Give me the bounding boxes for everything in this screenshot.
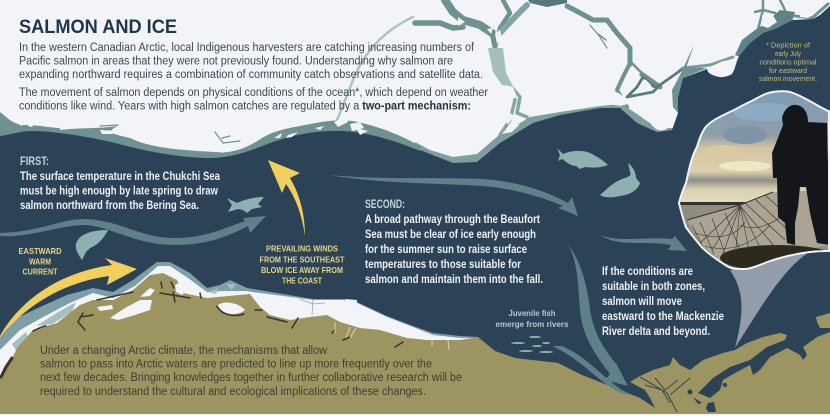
label: prevailing winds: FROM THE SOUTHEAST <box>260 254 345 264</box>
coast ice strip <box>0 266 478 385</box>
text: first <box>20 154 220 212</box>
left ice margin ribbon <box>0 112 420 158</box>
pale drips and cracks on coast <box>335 322 449 350</box>
net area <box>687 190 830 265</box>
text: both zones <box>602 264 724 338</box>
text: climate outlook: next few decades. Bringing knowledges together in further collaborative research will be <box>40 372 462 384</box>
footnote: for eastward <box>769 66 807 75</box>
text: second <box>365 197 543 286</box>
arrow: toward delta <box>568 245 628 386</box>
clouds <box>708 103 790 171</box>
text: both zones: eastward to the Mackenzie <box>602 309 724 323</box>
intro text: Pacific salmon in areas that they were not previously found. Understanding why salmon are <box>19 56 453 68</box>
callout wedge to delta <box>730 253 808 348</box>
label: prevailing winds: BLOW ICE AWAY FROM <box>261 265 343 275</box>
light ice lead <box>488 48 514 88</box>
intro text <box>19 42 488 112</box>
label: eastward warm current: CURRENT <box>22 266 58 276</box>
footnote: conditions optimal <box>760 58 817 66</box>
text: first: must be high enough by late spring to draw <box>20 184 219 198</box>
crack lines on shelf <box>300 299 325 315</box>
intro text: The movement of salmon depends on physical conditions of the ocean*, which depend on weather <box>19 87 488 99</box>
fishing net <box>687 192 795 262</box>
footnote: * Depiction of <box>766 40 811 50</box>
text: both zones: salmon will move <box>602 294 682 308</box>
salmon icons <box>76 148 640 260</box>
coast ice haze <box>0 262 478 385</box>
delta rivers <box>640 377 690 412</box>
label: prevailing winds: PREVAILING WINDS <box>266 244 338 254</box>
ice patches on land <box>97 278 245 320</box>
label: prevailing winds <box>260 244 345 286</box>
footnote: early July <box>775 49 801 58</box>
ice floes <box>14 14 812 153</box>
spike and band near right floes <box>672 45 707 113</box>
text: climate outlook: salmon to pass into Arctic waters are predicted to line up more frequently over the <box>40 358 432 370</box>
text: second: temperatures to those suitable for <box>365 257 521 271</box>
title: SALMON AND ICE <box>19 17 177 38</box>
text: both zones: River delta and beyond. <box>602 324 710 338</box>
arrow: Chukchi current <box>0 216 266 245</box>
floe offshore <box>345 299 357 305</box>
ice margin upper right <box>735 10 795 58</box>
text: first: FIRST: <box>20 154 49 168</box>
footnote <box>759 40 817 83</box>
footnote: salmon movement. <box>759 74 817 83</box>
dark ice patch top <box>528 0 567 7</box>
photo: harvester with net <box>675 90 830 275</box>
intro text: In the western Canadian Arctic, local Indigenous harvesters are catching increasing numbers of <box>19 42 475 54</box>
ground shadow <box>720 245 824 268</box>
text: second: Sea must be clear of ice early enough <box>365 227 536 241</box>
text: second: SECOND: <box>365 197 405 211</box>
coast dark shoreline marks <box>1 282 403 377</box>
intro text: conditions like wind. Years with high salmon catches are regulated by a two-part mechanism: <box>19 100 471 112</box>
text: second: A broad pathway through the Beaufort <box>365 212 540 226</box>
icon: salmon top <box>557 148 608 169</box>
label: eastward warm current: WARM <box>29 256 51 266</box>
icon: juvenile fish school <box>511 336 553 353</box>
label: prevailing winds: THE COAST <box>282 276 323 286</box>
label: juvenile fish: Juvenile fish <box>508 309 556 318</box>
bottom page margin <box>0 414 830 416</box>
arrow: juvenile fish from river <box>553 346 628 395</box>
arrow: offshore current <box>600 235 687 251</box>
land <box>0 273 830 414</box>
text: first: salmon northward from the Bering Sea. <box>20 198 199 212</box>
text: both zones: suitable in both zones, <box>602 279 705 293</box>
text: second: for the summer sun to raise surface <box>365 242 527 256</box>
label: eastward warm current: EASTWARD <box>18 246 62 256</box>
text: climate outlook <box>40 345 462 398</box>
arrow: prevailing winds <box>268 160 305 236</box>
text: climate outlook: Under a changing Arctic climate, the mechanisms that allow <box>40 345 328 357</box>
current arrows <box>0 175 687 395</box>
label: juvenile fish: emerge from rivers <box>496 320 569 329</box>
land island <box>816 313 830 328</box>
arrow: Beaufort current <box>330 175 578 216</box>
label: juvenile fish <box>496 309 569 329</box>
text: climate outlook: required to understand the cultural and ecological implications of these changes. <box>40 386 426 398</box>
teal mottling on coastal ice <box>12 284 236 350</box>
text: both zones: If the conditions are <box>602 264 693 278</box>
floes by the right cluster <box>621 65 640 92</box>
icon: salmon small <box>227 197 264 213</box>
icon: salmon leaping <box>600 163 640 197</box>
icon: salmon jumping <box>76 230 108 260</box>
intro text: expanding northward requires a combination of community catch observations and satellite data. <box>19 69 483 81</box>
floes along central lead <box>505 85 517 100</box>
ice margin central <box>415 104 680 170</box>
harvester silhouette <box>772 105 830 245</box>
label: eastward warm current <box>18 246 62 276</box>
text: first: The surface temperature in the Chukchi Sea <box>20 169 220 183</box>
arrow: eastward warm current <box>0 258 137 338</box>
ice crack network <box>100 0 828 143</box>
delta ponds <box>688 383 727 412</box>
text: second: salmon and maintain them into the fall. <box>365 272 543 286</box>
